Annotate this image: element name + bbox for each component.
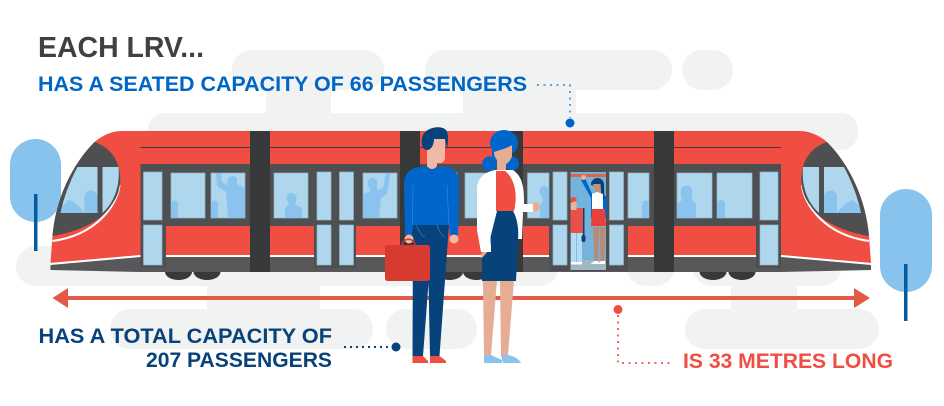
total capacity label	[38, 325, 332, 372]
man legs	[412, 225, 449, 356]
woman shoes	[484, 355, 521, 363]
double arrow: length	[52, 288, 870, 308]
man neck	[427, 145, 437, 169]
pillars	[250, 131, 674, 272]
briefcase	[385, 239, 430, 281]
woman hands	[481, 202, 540, 260]
window silhouettes	[171, 173, 725, 218]
leader: length	[614, 305, 673, 363]
tree right	[880, 189, 932, 321]
man with bag	[385, 127, 459, 363]
sweater seams and pockets	[412, 185, 449, 237]
leader: seated capacity	[537, 85, 574, 128]
woman legs	[483, 280, 514, 355]
man shoes	[412, 356, 446, 363]
man hands	[404, 234, 458, 244]
leader: total capacity	[344, 342, 400, 352]
total capacity label: 207 PASSENGERS	[146, 349, 332, 372]
nose right	[781, 131, 871, 272]
woman	[477, 130, 540, 363]
man face	[433, 137, 445, 163]
woman sleeve	[477, 222, 491, 252]
man hair	[422, 127, 448, 150]
background clouds	[16, 50, 897, 349]
seated capacity label: HAS A SEATED CAPACITY OF 66 PASSENGERS	[38, 73, 527, 96]
tram	[50, 131, 871, 280]
nose left	[50, 131, 140, 272]
woman top	[496, 171, 516, 211]
windows	[144, 172, 778, 265]
open door with passengers	[570, 172, 607, 270]
woman skirt	[482, 211, 518, 281]
total capacity label: HAS A TOTAL CAPACITY OF	[38, 325, 332, 348]
woman hair	[482, 130, 519, 172]
door sections	[140, 226, 781, 271]
woman face	[494, 145, 512, 173]
woman cardigan	[477, 170, 533, 252]
length label: IS 33 METRES LONG	[683, 350, 893, 373]
heading: EACH LRV...	[38, 32, 204, 64]
tree left	[10, 139, 61, 251]
man sweater	[404, 167, 459, 235]
wheels	[165, 272, 756, 280]
tram body	[50, 131, 871, 272]
